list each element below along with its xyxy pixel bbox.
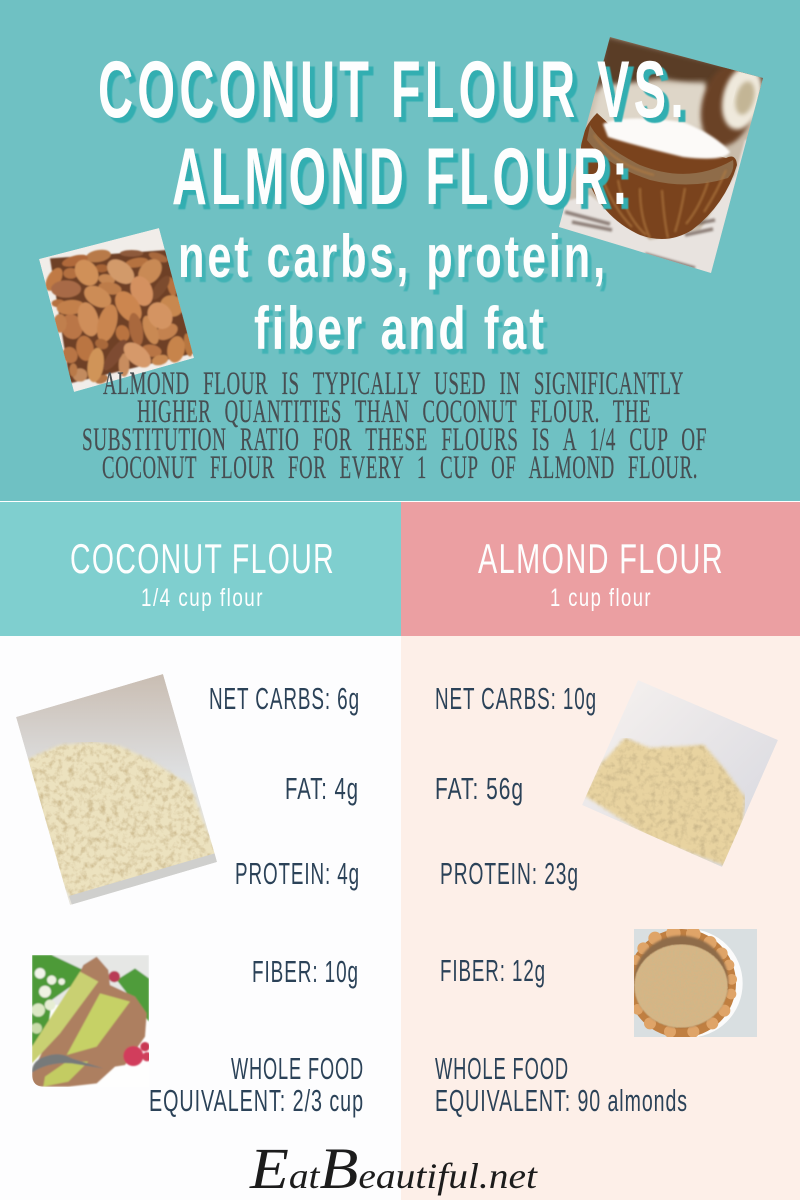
- photo: coconut flour pile: [10, 674, 218, 905]
- stat: net carbs: NET CARBS: 6g: [209, 681, 360, 716]
- almond flour stats: [435, 681, 688, 1118]
- photo: almond flour pie crust: [627, 926, 757, 1038]
- subtitle: [178, 223, 608, 362]
- subtitle line 1: net carbs, protein,: [178, 223, 608, 290]
- stat: whole food equivalent: EQUIVALENT: 2/3 cup: [149, 1083, 364, 1118]
- stat: whole food equivalent: [149, 1051, 364, 1118]
- background: coconut column: [0, 636, 401, 1200]
- panel: coconut flour header: [0, 502, 401, 636]
- stat: fat: FAT: 4g: [285, 771, 359, 806]
- background: almond column: [401, 636, 800, 1200]
- heading: coconut flour: COCONUT FLOUR: [70, 535, 335, 582]
- subtitle line 2: fiber and fat: [254, 295, 547, 362]
- stat: whole food equivalent: [435, 1051, 688, 1118]
- footer wordmark: EatBeautiful.net: [249, 1136, 538, 1200]
- stat: whole food equivalent: WHOLE FOOD: [435, 1051, 569, 1086]
- title: [98, 45, 688, 222]
- coconut flour stats: [149, 681, 364, 1118]
- stat: whole food equivalent: WHOLE FOOD: [231, 1051, 364, 1086]
- stat: fiber: FIBER: 10g: [252, 954, 359, 989]
- stat: protein: PROTEIN: 23g: [440, 856, 579, 891]
- stat: protein: PROTEIN: 4g: [235, 856, 360, 891]
- panel: almond flour header: [401, 502, 800, 636]
- photo: almonds: [39, 228, 194, 392]
- background: top teal panel: [0, 0, 800, 501]
- intro text block: [82, 366, 707, 486]
- subheading: 1/4 cup flour: 1/4 cup flour: [141, 584, 264, 612]
- stat: net carbs: NET CARBS: 10g: [435, 681, 597, 716]
- photo: halved coconut: [559, 37, 763, 273]
- stat: fat: FAT: 56g: [435, 771, 524, 806]
- photo: slice of cake: [31, 955, 152, 1087]
- subheading: 1 cup flour: 1 cup flour: [550, 584, 652, 612]
- stat: fiber: FIBER: 12g: [440, 953, 546, 988]
- photo: almond flour pile: [582, 680, 778, 867]
